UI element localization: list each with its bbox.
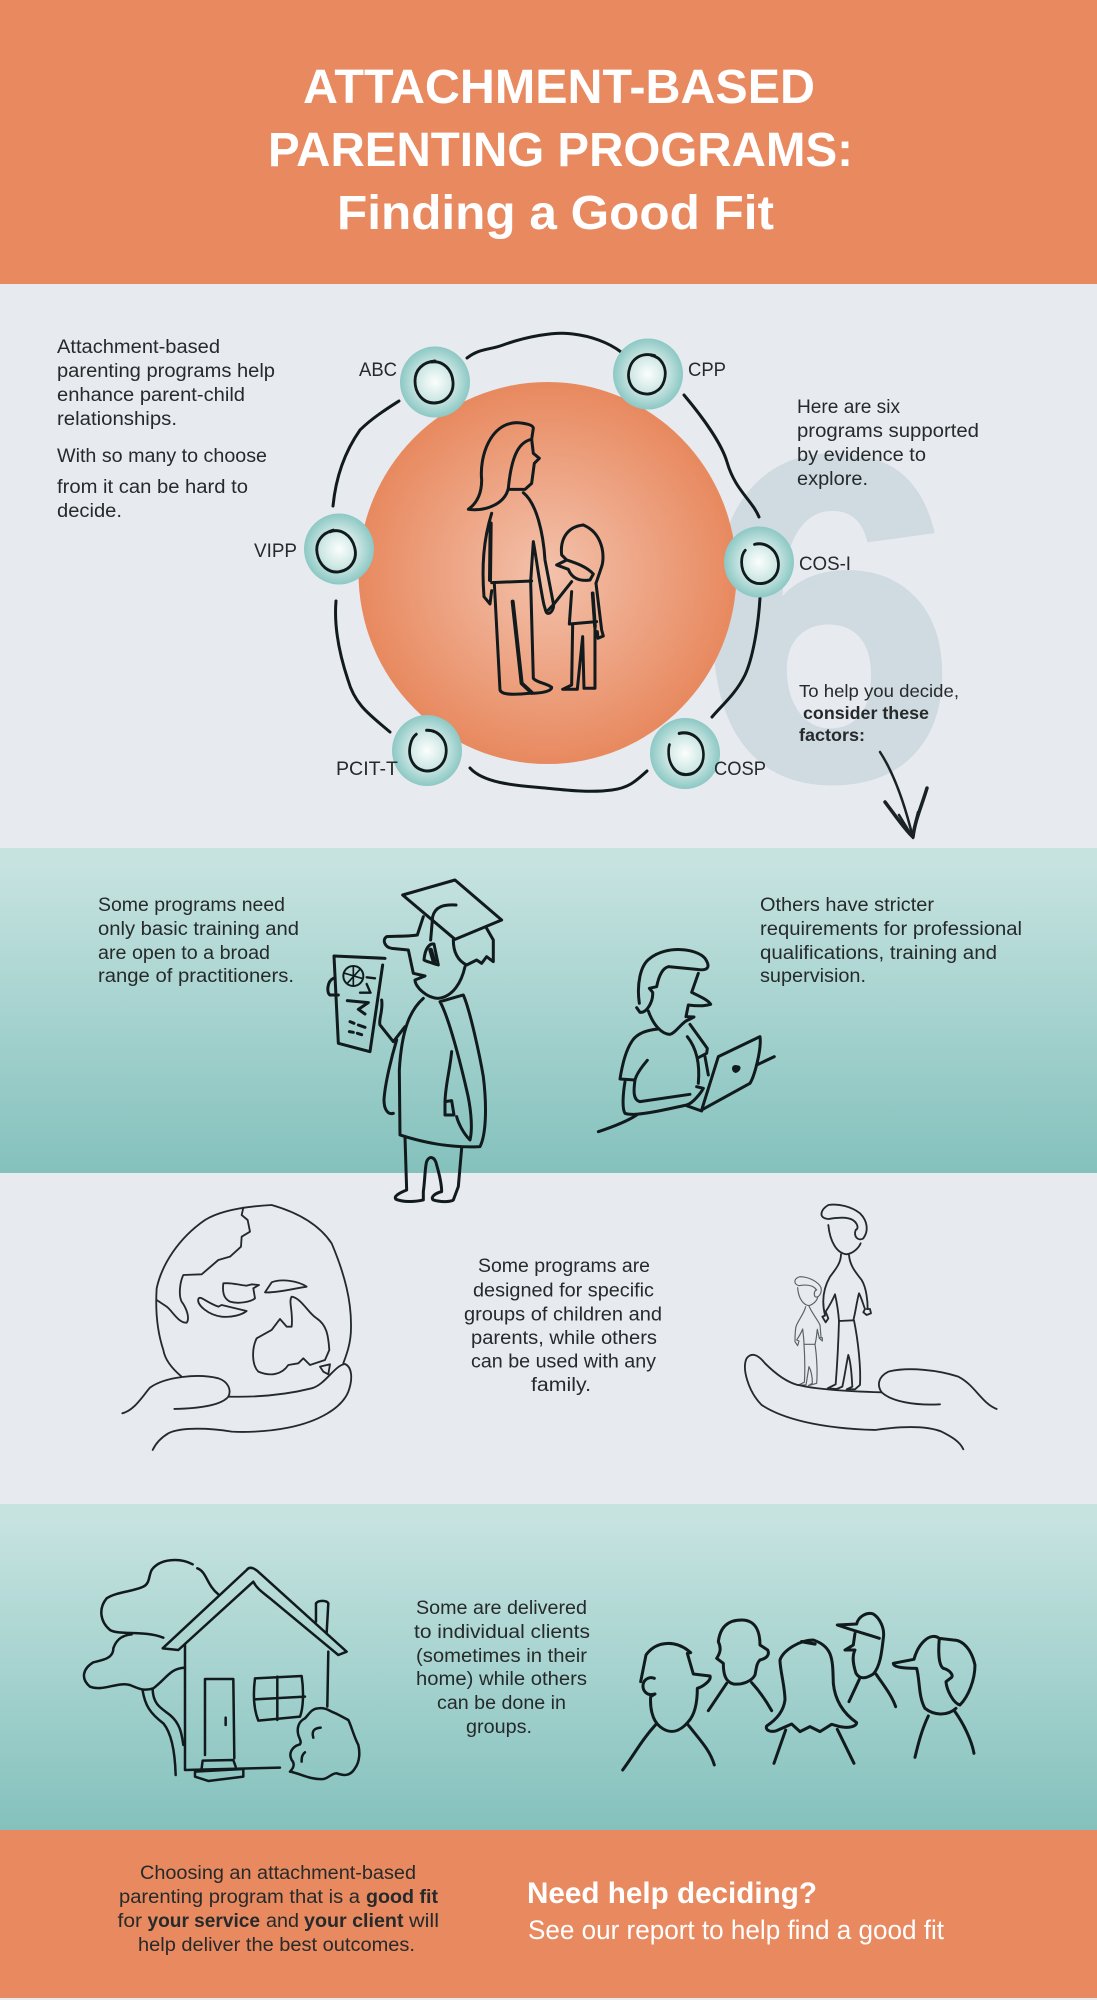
text: specific groups: can be used with any bbox=[471, 1352, 657, 1372]
text: stricter requirements: supervision. bbox=[760, 966, 866, 987]
program node: ABC bbox=[359, 346, 470, 418]
text: good fit summary: parenting program that is a bbox=[119, 1887, 360, 1908]
text: six programs: programs supported bbox=[797, 421, 979, 442]
text: delivery format: (sometimes in their bbox=[416, 1646, 588, 1667]
illustration: parent and child on hand bbox=[745, 1205, 997, 1449]
panel: header bbox=[0, 0, 1097, 284]
panel: six programs bbox=[0, 284, 1097, 875]
arrow down bbox=[880, 752, 927, 838]
text: consider these factors: consider these bbox=[803, 703, 929, 723]
title: Finding a Good Fit bbox=[337, 187, 774, 240]
title: ATTACHMENT-BASED bbox=[303, 61, 815, 114]
text: delivery format: home) while others bbox=[416, 1669, 587, 1690]
text: specific groups: designed for specific bbox=[473, 1280, 654, 1302]
program node: CPP bbox=[613, 338, 726, 410]
illustration: house and trees bbox=[84, 1560, 359, 1781]
big number six: 6 bbox=[700, 363, 955, 875]
text: consider these factors: To help you decide, bbox=[799, 681, 959, 701]
panel: specific groups bbox=[0, 1173, 1097, 1504]
text: consider these factors bbox=[799, 681, 959, 745]
title bbox=[268, 61, 853, 240]
text: basic training bbox=[98, 895, 299, 987]
text: consider these factors: factors: bbox=[799, 725, 865, 745]
panel: footer bbox=[0, 1830, 1097, 1998]
text: six programs: by evidence to bbox=[797, 445, 926, 466]
call to action: Need help deciding? bbox=[527, 1877, 817, 1910]
text: six programs: explore. bbox=[797, 469, 868, 490]
text: delivery format: can be done in bbox=[437, 1693, 566, 1714]
text: intro: Attachment-based bbox=[57, 337, 220, 358]
text: good fit summary: good fit bbox=[366, 1887, 439, 1908]
program node: PCIT-T: PCIT-T bbox=[336, 759, 398, 780]
illustration: globe in hand bbox=[122, 1205, 351, 1450]
text: six programs: Here are six bbox=[797, 397, 901, 418]
text: basic training: are open to a broad bbox=[98, 943, 270, 964]
text: good fit summary: will bbox=[408, 1911, 439, 1932]
title: PARENTING PROGRAMS: bbox=[268, 124, 853, 177]
illustration: mother and child bbox=[468, 423, 603, 694]
text: intro: enhance parent-child bbox=[57, 385, 245, 406]
text: specific groups bbox=[464, 1256, 662, 1396]
text: good fit summary: your client bbox=[304, 1911, 404, 1932]
text: specific groups: parents, while others bbox=[471, 1328, 657, 1349]
text: good fit summary: help deliver the best outcomes. bbox=[138, 1935, 415, 1956]
panel: delivery format bbox=[0, 1504, 1097, 1830]
text: stricter requirements bbox=[760, 895, 1022, 987]
program node: PCIT-T bbox=[336, 715, 462, 786]
program node: CPP: CPP bbox=[688, 360, 726, 381]
program node: VIPP bbox=[254, 514, 374, 584]
text: basic training: range of practitioners. bbox=[98, 966, 294, 987]
text: intro: With so many to choose bbox=[57, 446, 267, 467]
text: intro bbox=[57, 337, 275, 522]
connecting hand-drawn ring bbox=[333, 333, 760, 791]
text: good fit summary: your service bbox=[148, 1911, 260, 1932]
text: good fit summary: Choosing an attachment-based bbox=[140, 1863, 416, 1884]
program node: COSP bbox=[650, 718, 766, 789]
text: stricter requirements: requirements for professional bbox=[760, 919, 1022, 940]
illustration: group of people bbox=[623, 1613, 975, 1770]
call to action: See our report to help find a good fit bbox=[528, 1915, 944, 1945]
text: good fit summary: and bbox=[266, 1911, 299, 1932]
text: stricter requirements: qualifications, training and bbox=[760, 943, 997, 964]
illustration: graduate with certificate bbox=[328, 880, 502, 1202]
text: six programs bbox=[797, 397, 979, 490]
call to action bbox=[527, 1877, 944, 1945]
text: stricter requirements: Others have stricter bbox=[760, 895, 935, 916]
text: specific groups: Some programs are bbox=[478, 1256, 650, 1277]
panel: training requirements bbox=[0, 848, 1097, 1202]
text: delivery format: to individual clients bbox=[414, 1622, 590, 1643]
text: specific groups: family. bbox=[531, 1375, 591, 1396]
central circle bbox=[358, 382, 736, 764]
text: delivery format bbox=[414, 1598, 590, 1738]
program node: VIPP: VIPP bbox=[254, 541, 297, 562]
text: good fit summary: for bbox=[118, 1911, 143, 1932]
text: good fit summary bbox=[118, 1863, 439, 1956]
text: intro: from it can be hard to bbox=[57, 477, 248, 498]
program node: COSP: COSP bbox=[714, 759, 766, 780]
text: intro: relationships. bbox=[57, 409, 177, 430]
text: specific groups: groups of children and bbox=[464, 1304, 662, 1326]
text: intro: decide. bbox=[57, 501, 122, 522]
text: delivery format: Some are delivered bbox=[416, 1598, 587, 1619]
text: basic training: Some programs need bbox=[98, 895, 285, 916]
text: intro: parenting programs help bbox=[57, 361, 275, 382]
illustration: person with laptop bbox=[598, 950, 774, 1132]
program node: COS-I: COS-I bbox=[799, 554, 851, 575]
program node: COS-I bbox=[724, 526, 851, 598]
text: delivery format: groups. bbox=[466, 1717, 532, 1738]
text: basic training: only basic training and bbox=[98, 919, 299, 940]
program node: ABC: ABC bbox=[359, 360, 397, 381]
